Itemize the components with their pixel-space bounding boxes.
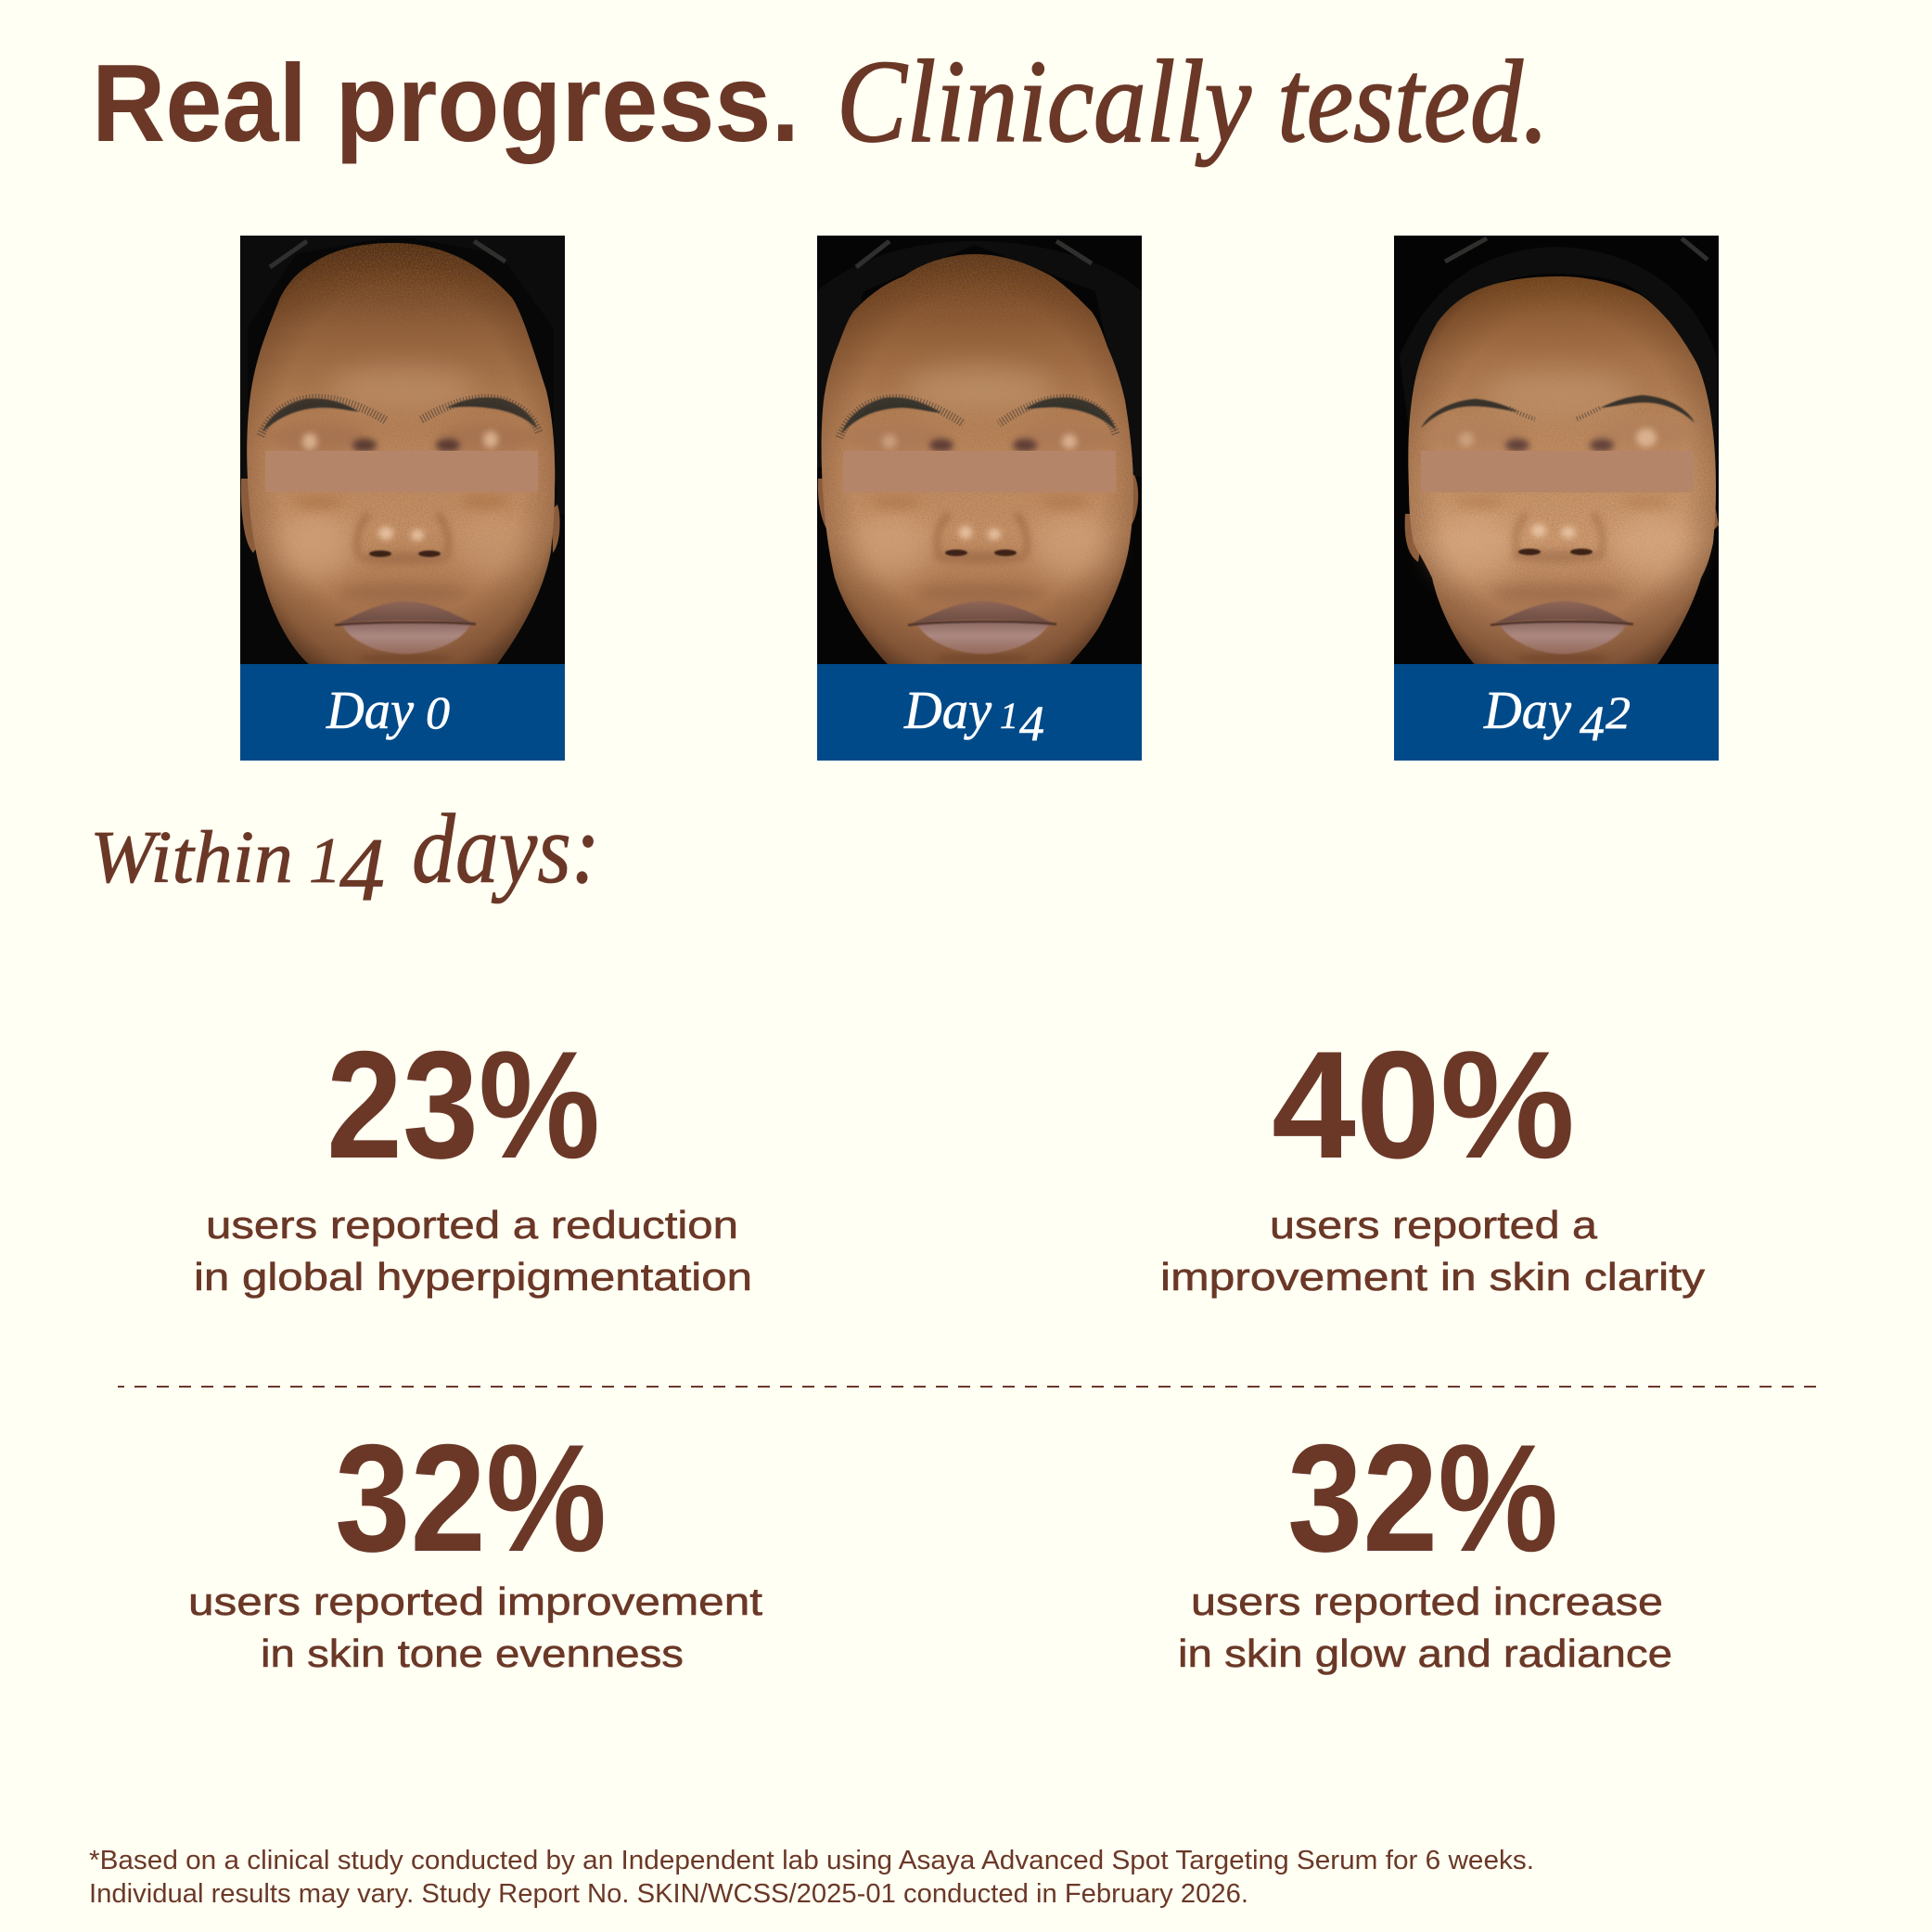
face: [818, 254, 1138, 664]
label bar: Day 0: [240, 664, 565, 761]
heading: Within 14 days: [90, 795, 600, 920]
label: Day 14: 4: [1019, 696, 1044, 751]
label: Day 0: 0: [426, 686, 450, 738]
stat: 40% skin clarity: [1160, 1019, 1705, 1299]
label: Day 42: 2: [1606, 686, 1631, 738]
label: Day 14: [903, 680, 1044, 751]
heading: Within 14 days: 4: [339, 820, 385, 920]
stat: 32% skin tone evenness: in skin tone evenness: [261, 1631, 684, 1675]
heading: Within 14 days: days:: [412, 795, 600, 904]
label bar: Day 42: [1394, 664, 1719, 761]
label: Day 42: 4: [1580, 696, 1605, 751]
nose: [357, 514, 450, 565]
eye privacy bar: [265, 451, 538, 493]
label: Day 42: [1483, 680, 1631, 751]
heading: Within 14 days: Within: [90, 815, 293, 899]
title: [92, 37, 1549, 167]
stat: 23% global hyperpigmentation: users reported a reduction: [206, 1203, 738, 1247]
stat: 23% global hyperpigmentation: [194, 1019, 752, 1299]
photo panel: Day 0: [240, 236, 565, 761]
dashed divider: [118, 1386, 1817, 1388]
label: Day 0: Day: [326, 680, 414, 740]
footnote: [89, 1846, 1534, 1909]
eyebrows and eyelids: [261, 398, 539, 453]
stat: 32% glow and radiance: in skin glow and radiance: [1178, 1631, 1672, 1675]
stat: 32% skin tone evenness: 32%: [335, 1413, 607, 1583]
stat: 40% skin clarity: users reported a: [1270, 1203, 1598, 1247]
hair: [240, 236, 565, 514]
footnote: Individual results may vary. Study Report No. SKIN/WCSS/2025-01 conducted in February 2026.: [89, 1879, 1248, 1909]
nose: [934, 514, 1027, 564]
footnote: *Based on a clinical study conducted by an Independent lab using Asaya Advanced Spot Targeting Serum for 6 weeks.: [89, 1846, 1534, 1875]
heading: Within 14 days: 1: [309, 825, 341, 897]
face: [241, 243, 560, 664]
stat: 23% global hyperpigmentation: in global hyperpigmentation: [194, 1255, 752, 1299]
headband: [1400, 247, 1717, 467]
eyebrows and eyelids: [839, 397, 1118, 453]
stat: 32% skin tone evenness: [188, 1413, 762, 1675]
stat: 32% glow and radiance: [1178, 1413, 1672, 1675]
photo panel: Day 42: [1394, 236, 1719, 761]
label: Day 14: 1: [1000, 695, 1018, 736]
title: Real progress.: [92, 42, 800, 165]
lips: [908, 601, 1056, 664]
stat: 40% skin clarity: improvement in skin clarity: [1160, 1255, 1705, 1299]
eyebrows and eyelids: [1421, 395, 1696, 452]
label: Day 42: Day: [1483, 680, 1571, 740]
stat: 32% glow and radiance: 32%: [1287, 1413, 1558, 1583]
headband: [817, 241, 1142, 477]
title: Clinically tested.: [837, 37, 1549, 167]
lips: [1491, 601, 1633, 664]
photo panel: Day 14: [817, 236, 1142, 761]
nose: [1511, 514, 1604, 563]
lips: [335, 601, 476, 664]
stat: 40% skin clarity: 40%: [1272, 1019, 1575, 1190]
eye privacy bar: [1421, 451, 1694, 493]
label bar: Day 14: [817, 664, 1142, 761]
stat: 32% glow and radiance: users reported increase: [1191, 1580, 1663, 1623]
face: [1405, 276, 1719, 664]
label: Day 14: Day: [903, 680, 992, 740]
eye privacy bar: [843, 451, 1116, 493]
stat: 23% global hyperpigmentation: 23%: [326, 1019, 600, 1190]
stat: 32% skin tone evenness: users reported improvement: [188, 1580, 762, 1623]
